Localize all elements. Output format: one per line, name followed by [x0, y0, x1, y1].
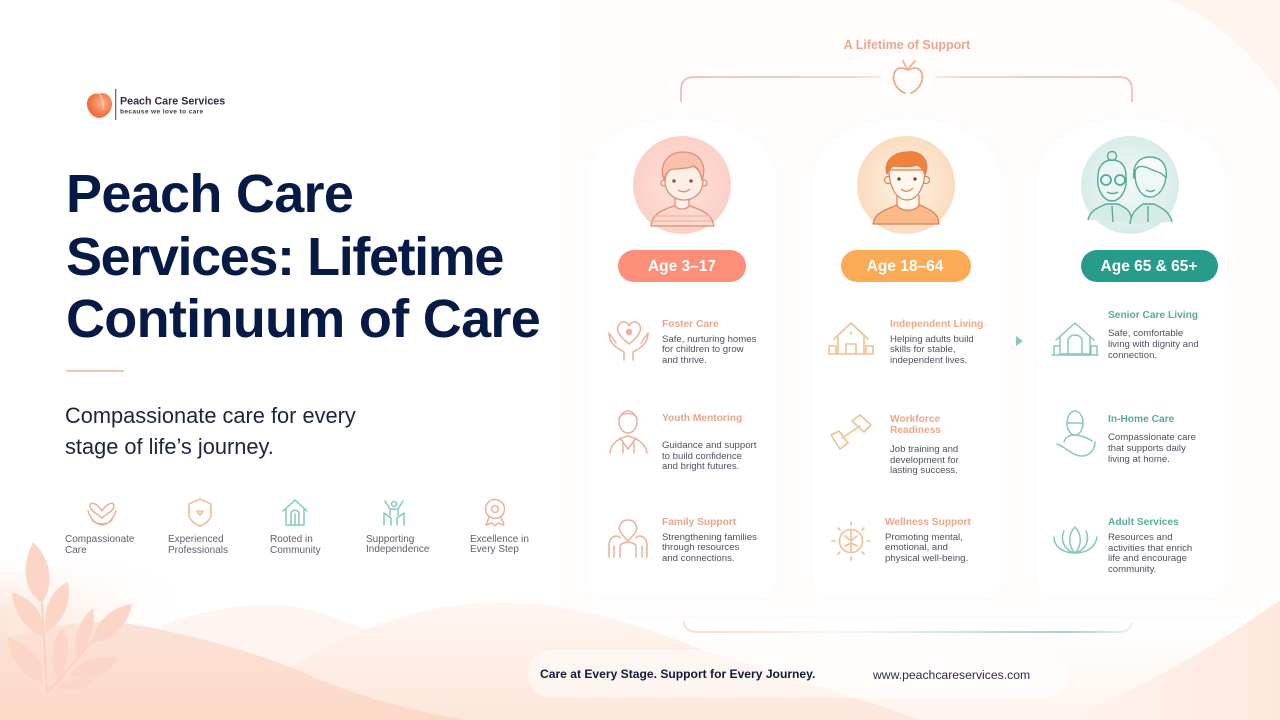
service: Senior Care Living: Safe, comfortable — [1108, 328, 1183, 339]
portrait: seniors — [1081, 136, 1179, 234]
service: Foster Care — [609, 319, 757, 366]
title: Continuum of Care — [66, 289, 540, 349]
service: Independent Living: Helping adults build — [890, 334, 974, 345]
service: Youth Mentoring — [610, 411, 757, 472]
title: Services: Lifetime — [66, 227, 503, 287]
value: Experienced Professionals: Professionals — [168, 545, 228, 556]
service: Workforce Readiness — [831, 414, 960, 476]
icon: family — [609, 520, 647, 557]
icon: apple — [893, 61, 922, 93]
icon: lotus — [1054, 527, 1097, 553]
service: Workforce Readiness: development for — [890, 455, 960, 466]
icon: house — [829, 323, 873, 354]
service: Family Support: Family Support — [662, 517, 737, 528]
icon: raised arms person — [384, 501, 404, 525]
age pill: 18-64 — [841, 250, 971, 282]
service: Adult Services: Adult Services — [1108, 517, 1179, 528]
service: Youth Mentoring: to build confidence — [662, 451, 742, 462]
subtitle: stage of life’s journey. — [65, 434, 274, 459]
service: Youth Mentoring: and bright futures. — [662, 461, 739, 472]
service: Senior Care Living: living with dignity and — [1108, 339, 1199, 350]
value: Rooted in Community: Rooted in — [270, 534, 313, 545]
icon: mentor — [610, 411, 647, 453]
service: Independent Living: independent lives. — [890, 355, 967, 366]
service: Wellness Support: physical well-being. — [885, 553, 968, 564]
age pill: 3-17: Age 3–17 — [648, 258, 716, 275]
value: Rooted in Community: Community — [270, 545, 321, 556]
logo: because we love to care — [120, 108, 204, 116]
service: Workforce Readiness: Job training and — [890, 444, 958, 455]
service: Independent Living: Independent Living — [890, 319, 983, 330]
service: In-Home Care: Compassionate care — [1108, 432, 1196, 443]
service: Senior Care Living — [1052, 310, 1199, 361]
decorative leaf sprig — [8, 542, 132, 693]
service: Youth Mentoring: Youth Mentoring — [662, 413, 742, 424]
column cards — [587, 118, 1226, 598]
icon: peach logo — [87, 93, 112, 118]
subtitle: Compassionate care for every — [65, 403, 356, 428]
service: Adult Services: life and encourage — [1108, 553, 1187, 564]
value: Compassionate Care: Care — [65, 545, 87, 556]
service: Senior Care Living: connection. — [1108, 350, 1157, 361]
service: Foster Care: Foster Care — [662, 319, 719, 330]
value: Experienced Professionals: Experienced — [168, 534, 224, 545]
value: Supporting Independence: Supporting — [366, 534, 414, 545]
subtitle — [65, 403, 356, 459]
value: Excellence in Every Step: Excellence in — [470, 534, 529, 545]
icon: dumbbell — [831, 415, 871, 449]
service: Wellness Support: Wellness Support — [885, 517, 971, 528]
icon: house — [283, 500, 307, 525]
value: Excellence in Every Step: Every Step — [470, 544, 519, 555]
service: Adult Services: Resources and — [1108, 532, 1173, 543]
service: Foster Care: and thrive. — [662, 355, 707, 366]
icon: shield — [189, 499, 211, 526]
service: In-Home Care — [1057, 411, 1196, 465]
service: Independent Living — [829, 319, 983, 366]
icon: brain and sun — [832, 522, 870, 560]
arrow — [1016, 336, 1023, 346]
value: Experienced Professionals — [168, 499, 228, 556]
service: Wellness Support — [832, 517, 971, 564]
service: Adult Services: activities that enrich — [1108, 543, 1192, 554]
value: Compassionate Care — [65, 503, 135, 556]
bottom connector — [684, 622, 1132, 632]
service: Family Support: Strengthening families — [662, 532, 757, 543]
service: Independent Living: skills for stable, — [890, 344, 956, 355]
service: Family Support: and connections. — [662, 553, 735, 564]
portrait: child — [633, 136, 731, 234]
service: Family Support — [609, 517, 757, 564]
value: Excellence in Every Step — [470, 500, 529, 555]
title: Peach Care — [66, 164, 353, 224]
service: Adult Services — [1054, 517, 1192, 575]
service: Foster Care: Safe, nurturing homes — [662, 334, 757, 345]
service: Workforce Readiness: Readiness — [890, 425, 941, 436]
website: www.peachcareservices.com — [872, 668, 1030, 682]
service: Wellness Support: emotional, and — [885, 542, 948, 553]
value: Supporting Independence: Independence — [366, 544, 430, 555]
service: Family Support: through resources — [662, 542, 740, 553]
service: Youth Mentoring: Guidance and support — [662, 440, 757, 451]
service: In-Home Care: In-Home Care — [1108, 414, 1175, 425]
age pill: 18-64: Age 18–64 — [867, 258, 944, 275]
service: Senior Care Living: Senior Care Living — [1108, 310, 1198, 321]
service: In-Home Care: that supports daily — [1108, 443, 1186, 454]
title — [66, 164, 540, 349]
footer pill — [528, 650, 1068, 698]
icon: heart in hands — [609, 322, 648, 360]
service: In-Home Care: living at home. — [1108, 454, 1170, 465]
age pill: 65+ — [1081, 250, 1218, 282]
service: Foster Care: for children to grow — [662, 344, 744, 355]
connector bracket — [681, 77, 1132, 102]
portrait: adult — [857, 136, 955, 234]
heading: A Lifetime of Support: A Lifetime of Support — [844, 38, 971, 52]
value: Compassionate Care: Compassionate — [65, 534, 135, 545]
service: Workforce Readiness: lasting success. — [890, 465, 958, 476]
service: Workforce Readiness: Workforce — [890, 414, 941, 425]
service: Wellness Support: Promoting mental, — [885, 532, 963, 543]
value: Supporting Independence — [366, 501, 430, 555]
icon: award rosette — [486, 500, 504, 526]
service: Adult Services: community. — [1108, 564, 1156, 575]
age pill: 65+: Age 65 & 65+ — [1101, 258, 1197, 275]
value: Rooted in Community — [270, 500, 321, 556]
tagline: Care at Every Stage. Support for Every Journey. — [540, 667, 815, 681]
icon: caregiver in hand — [1057, 411, 1095, 456]
logo: Peach Care Services — [120, 96, 225, 108]
icon: senior house — [1052, 323, 1098, 355]
logo — [87, 89, 225, 120]
age pill: 3-17 — [618, 250, 746, 282]
icon: heart in hands — [88, 503, 116, 525]
